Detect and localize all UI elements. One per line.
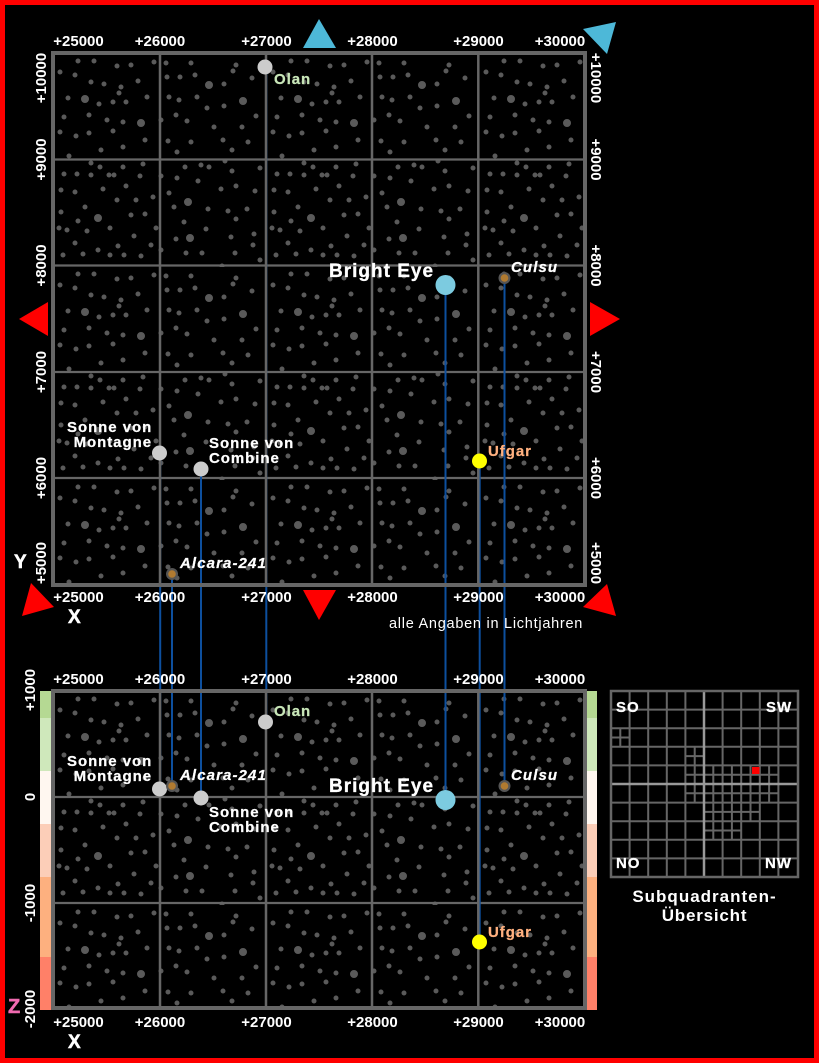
arrow: right red — [590, 302, 620, 336]
connecting lines between maps — [160, 67, 504, 942]
axis letters: Y — [14, 552, 27, 573]
panel: top map frame — [53, 53, 585, 585]
X axis labels top of map 2: +27000 — [241, 671, 292, 688]
X axis labels bottom of map 1: +27000 — [241, 589, 292, 606]
Y axis labels left: +10000 — [33, 53, 50, 103]
star labels bottom map: Sonne von — [209, 804, 294, 821]
arrow: bottom left red — [22, 583, 54, 616]
X axis labels top of map 1: +27000 — [241, 33, 292, 50]
panel: bottom map frame — [53, 691, 585, 1008]
arrow: top right teal — [583, 22, 616, 54]
Y axis labels left: +9000 — [33, 138, 50, 181]
X axis labels top of map 2: +25000 — [53, 671, 104, 688]
Y axis labels right — [587, 53, 604, 584]
panel: subquadrant overview — [611, 691, 798, 877]
direction labels: NO — [616, 855, 640, 872]
current subquadrant marker — [752, 767, 760, 774]
Z axis labels — [22, 669, 39, 1028]
star labels bottom map: Combine — [209, 819, 280, 836]
X axis labels bottom of map 2 — [53, 1014, 585, 1031]
X axis labels bottom of map 2: +27000 — [241, 1014, 292, 1031]
note: units: alle Angaben in Lichtjahren — [389, 616, 583, 632]
X axis labels top of map 1: +29000 — [453, 33, 504, 50]
X axis labels bottom of map 2: +29000 — [453, 1014, 504, 1031]
star labels top map: Montagne — [74, 434, 152, 451]
Y axis labels right: +6000 — [587, 457, 604, 499]
X axis labels bottom of map 1: +28000 — [347, 589, 398, 606]
Z axis labels: +1000 — [22, 669, 39, 711]
star labels bottom map: Montagne — [74, 768, 152, 785]
Y axis labels right: +8000 — [587, 244, 604, 287]
star labels bottom map: Olan — [274, 703, 311, 720]
star labels bottom map: Sonne von — [67, 753, 152, 770]
star labels top map: Sonne von — [209, 435, 294, 452]
X axis labels bottom of map 1 — [53, 589, 585, 606]
overview title: Übersicht — [662, 906, 747, 925]
direction labels: SO — [616, 699, 640, 716]
star labels top map: Olan — [274, 71, 311, 88]
overview title: Subquadranten- — [632, 887, 777, 906]
axis letters: X — [68, 1032, 81, 1053]
overview title — [632, 887, 777, 925]
Y axis labels right: +9000 — [587, 138, 604, 181]
Z axis labels: -1000 — [22, 884, 39, 922]
star field: bottom map — [52, 691, 585, 1009]
arrow: left red — [19, 302, 48, 336]
X axis labels bottom of map 2: +26000 — [135, 1014, 185, 1031]
X axis labels top of map 1: +25000 — [53, 33, 104, 50]
Y axis labels right: +10000 — [587, 53, 604, 103]
X axis labels top of map 2: +26000 — [135, 671, 185, 688]
Y axis labels left: +6000 — [33, 457, 50, 499]
X axis labels top of map 1: +28000 — [347, 33, 398, 50]
star labels bottom map: Ufgar — [488, 924, 532, 941]
star labels bottom map — [67, 703, 558, 941]
X axis labels bottom of map 2: +28000 — [347, 1014, 398, 1031]
X axis labels top of map 2: +30000 — [535, 671, 585, 688]
arrow: bottom red — [303, 590, 336, 620]
star field: top map — [52, 53, 585, 585]
X axis labels top of map 2 — [53, 671, 585, 688]
Z axis labels: -2000 — [22, 990, 39, 1028]
stars on top map — [152, 60, 510, 580]
Y axis labels right: +7000 — [587, 351, 604, 393]
star labels bottom map: Culsu — [511, 767, 558, 784]
horizontal grid lines — [53, 160, 585, 903]
direction labels: SW — [766, 699, 792, 716]
X axis labels bottom of map 1: +26000 — [135, 589, 185, 606]
Z axis labels: 0 — [22, 793, 39, 801]
Y axis labels left: +8000 — [33, 244, 50, 287]
Y axis labels right: +5000 — [587, 542, 604, 584]
star labels top map: Combine — [209, 450, 280, 467]
left Z scale bar — [40, 691, 51, 1010]
X axis labels bottom of map 2: +30000 — [535, 1014, 585, 1031]
star labels bottom map: Bright Eye — [329, 776, 434, 797]
axis letters: X — [68, 607, 81, 628]
Y axis labels left: +7000 — [33, 351, 50, 393]
star labels top map: Sonne von — [67, 419, 152, 436]
axis letters — [8, 552, 81, 1053]
right Z scale bar — [587, 691, 597, 1010]
stars on bottom map — [152, 714, 510, 950]
axis letters: Z — [8, 996, 20, 1018]
X axis labels top of map 1: +26000 — [135, 33, 185, 50]
X axis labels bottom of map 2: +25000 — [53, 1014, 104, 1031]
X axis labels top of map 1 — [53, 33, 585, 50]
star labels bottom map: Alcara-241 — [179, 767, 267, 784]
arrow: bottom right red — [583, 584, 616, 616]
Y axis labels left — [33, 53, 50, 584]
direction labels: NW — [765, 855, 792, 872]
star labels top map: Culsu — [511, 259, 558, 276]
X axis labels top of map 2: +28000 — [347, 671, 398, 688]
X axis labels top of map 2: +29000 — [453, 671, 504, 688]
star labels top map: Ufgar — [488, 443, 532, 460]
arrow: top teal — [303, 19, 336, 48]
star labels top map — [67, 71, 558, 572]
X axis labels bottom of map 1: +25000 — [53, 589, 104, 606]
star labels top map: Alcara-241 — [179, 555, 267, 572]
X axis labels bottom of map 1: +29000 — [453, 589, 504, 606]
star labels top map: Bright Eye — [329, 261, 434, 282]
direction labels — [616, 699, 792, 872]
X axis labels top of map 1: +30000 — [535, 33, 585, 50]
Y axis labels left: +5000 — [33, 542, 50, 584]
X axis labels bottom of map 1: +30000 — [535, 589, 585, 606]
